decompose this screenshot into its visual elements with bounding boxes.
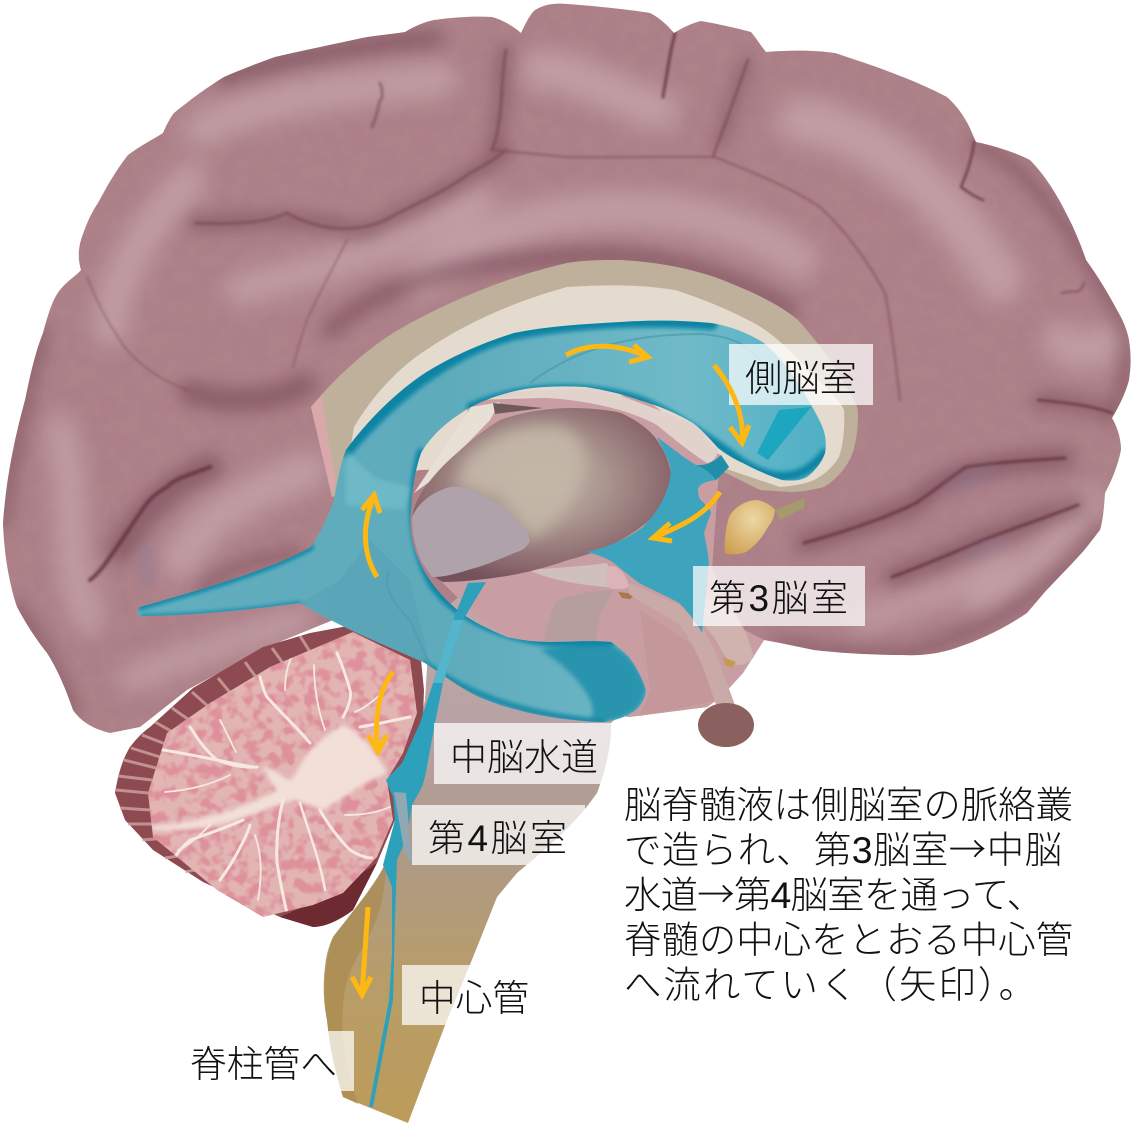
label box: 側脳室: 側脳室 [745,358,857,399]
label box: 第4脳室: 第4脳室 [428,818,567,859]
olfactory bulb / gold structure [725,498,805,554]
deep sulci [90,33,1112,580]
label box: 側脳室 [729,344,873,405]
broad fold shadows [3,38,1126,710]
white matter [152,725,387,830]
explanatory text block: で造られ、第3脳室→中脳 [624,820,1062,874]
darker gold edge of the spinal cord [325,865,386,1104]
label box: 中心管: 中心管 [419,978,529,1019]
corpus callosum band [311,260,858,497]
lateral ventricle [137,320,826,722]
arrow: lateral ventricle front [714,365,749,443]
label box: 第3脳室 [693,566,865,626]
brainstem and spinal cord [324,570,660,1123]
label box: 脊柱管へ [190,1031,354,1091]
label box: 中脳水道 [434,723,612,784]
label box: 中脳水道: 中脳水道 [450,737,598,778]
cut surface [148,632,417,917]
arrow: lateral ventricle top [566,345,648,362]
cerebral aqueduct [369,582,486,1107]
explanatory text block: 水道→第4脳室を通って、 [624,865,1044,919]
arrow: central canal downward [352,907,371,995]
third ventricle [586,437,729,633]
hypothalamus tubes and pituitary [629,583,754,747]
explanatory text block: 脳脊髄液は側脳室の脈絡叢 [624,784,1073,826]
diencephalon and midbrain tissue [414,388,764,717]
label box: 脊柱管へ: 脊柱管へ [190,1044,337,1085]
cerebellum [115,626,424,927]
faint sulci [87,50,1084,400]
pulvinar lavender lobe [412,487,530,577]
blue-grey veins [140,548,154,583]
label box: 中心管 [402,965,530,1025]
explanatory text block [624,784,1073,1006]
outer folia rim [115,625,424,927]
arrow: lateral ventricle back [362,495,380,577]
explanatory text block: へ流れていく（矢印）。 [624,964,1036,1006]
thalamus [412,408,671,582]
explanatory text block: 脊髄の中心をとおる中心管 [624,919,1073,961]
light gyri [60,70,1110,680]
arrow: aqueduct to fourth ventricle [368,672,393,752]
arrow: third ventricle [653,492,720,541]
cerebrum: brain hemisphere [0,0,1134,760]
label box: 第3脳室: 第3脳室 [709,578,848,619]
label box: 第4脳室 [412,805,585,865]
pituitary gland [698,703,754,747]
